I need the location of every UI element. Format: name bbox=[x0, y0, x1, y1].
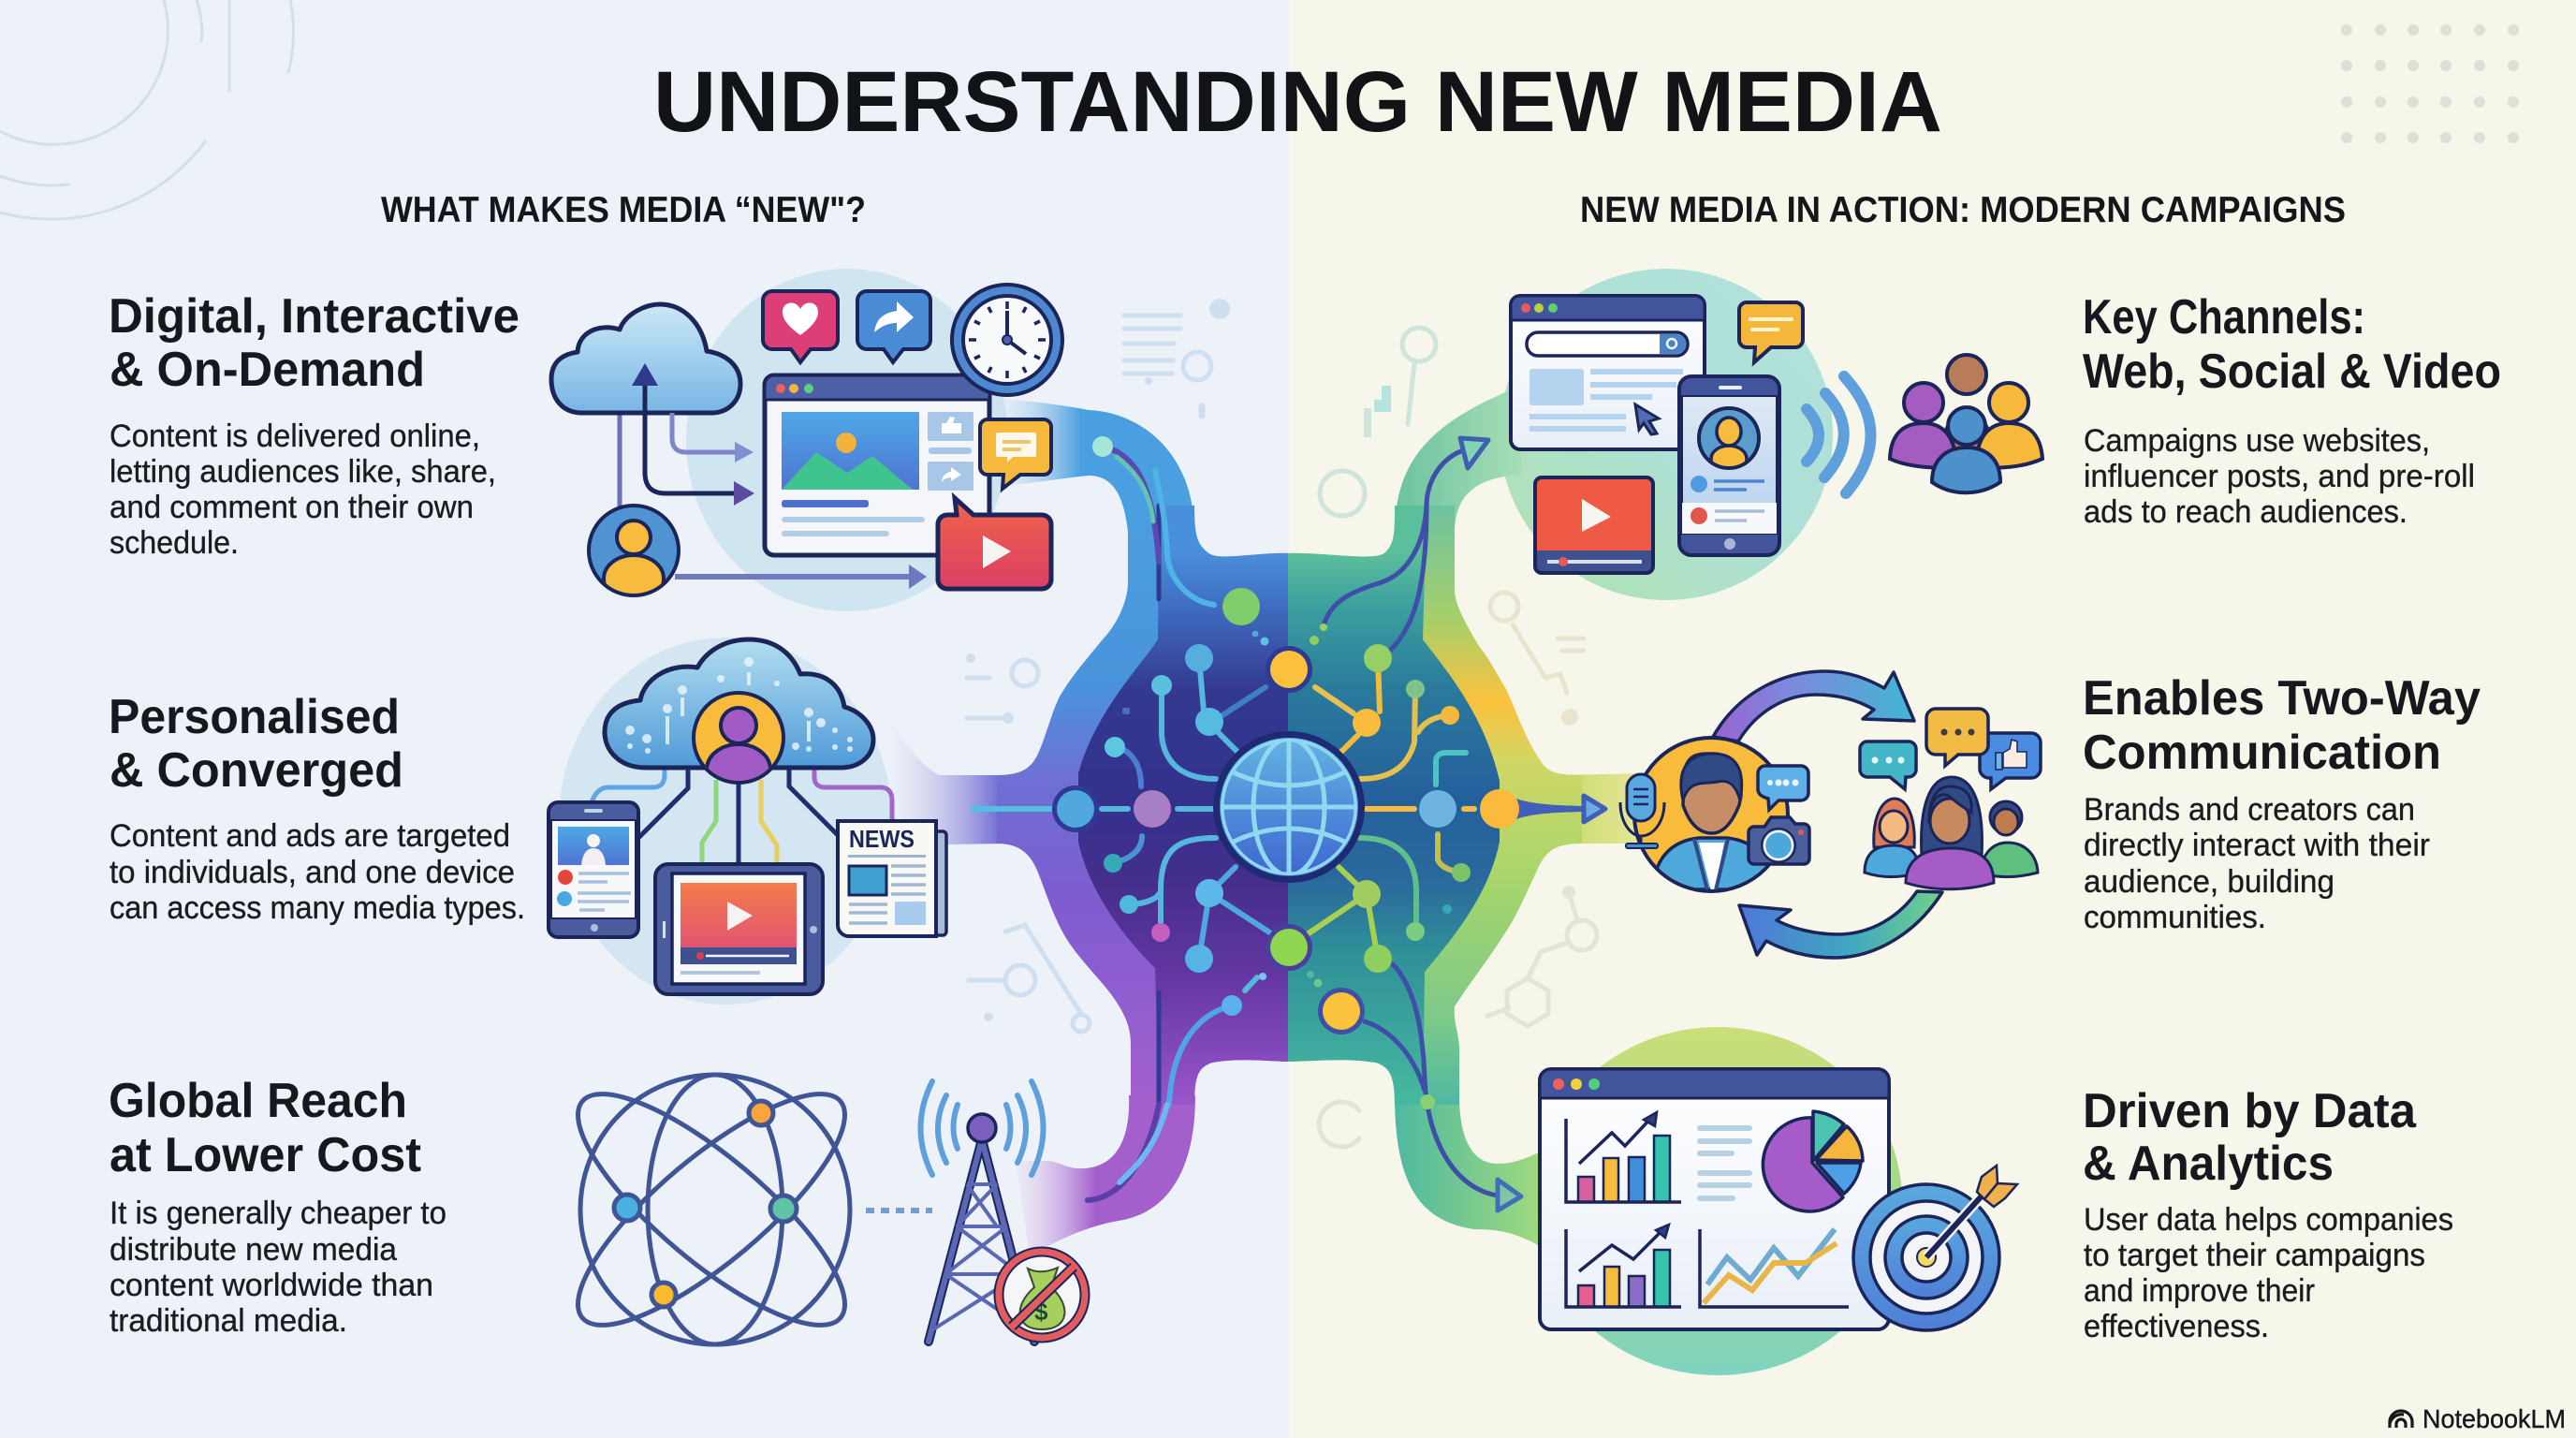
left section heading: WHAT MAKES MEDIA “NEW"? bbox=[381, 190, 866, 230]
dotted link bbox=[866, 1208, 932, 1213]
arm: bottom-right bbox=[1395, 1095, 1549, 1251]
connector lines bbox=[592, 768, 892, 864]
line chart bbox=[1700, 1229, 1849, 1307]
bubble: digital bbox=[686, 269, 1008, 611]
arrow: cloud sync dark bbox=[632, 363, 754, 506]
node: bottom right junction bbox=[1420, 1094, 1435, 1109]
title: UNDERSTANDING NEW MEDIA bbox=[653, 54, 1942, 150]
icon: video player bbox=[938, 498, 1051, 589]
icon: yellow message bubble bbox=[1739, 302, 1803, 362]
text block: global reach: content worldwide than bbox=[110, 1268, 433, 1303]
icon: heart speech bubble bbox=[763, 291, 838, 362]
arrow: user to video bbox=[675, 565, 927, 589]
icon: microphone bbox=[1620, 774, 1664, 848]
decoration: faint circuit marks bbox=[966, 299, 1597, 1147]
text block: two-way communication bbox=[2083, 671, 2481, 935]
text block: key channels: Web, Social & Video bbox=[2083, 345, 2501, 399]
arrow: outgoing loop bbox=[1713, 671, 1914, 741]
icon group: global network and tower bbox=[549, 1061, 1086, 1358]
text block: global reach: at Lower Cost bbox=[110, 1128, 421, 1182]
footer: NotebookLM badge: NotebookLM bbox=[2422, 1404, 2566, 1433]
arm: top-right bbox=[1395, 386, 1521, 534]
icon: share speech bubble bbox=[857, 291, 930, 362]
arrow: return loop bbox=[1739, 891, 1942, 958]
bar chart: bottom bbox=[1566, 1225, 1681, 1307]
text block: personalised: & Converged bbox=[110, 743, 403, 798]
bubble: channels bbox=[1500, 269, 1833, 600]
icon: clock bbox=[952, 285, 1062, 395]
icon: browser window bbox=[765, 375, 989, 555]
text block: data and analytics: effectiveness. bbox=[2084, 1309, 2269, 1344]
text block: digital, interactive: & On-Demand bbox=[110, 343, 425, 397]
text block: two-way communication: Communication bbox=[2083, 726, 2441, 780]
text block: global reach: distribute new media bbox=[110, 1232, 397, 1268]
right section heading: NEW MEDIA IN ACTION: MODERN CAMPAIGNS bbox=[1580, 190, 2346, 230]
text block: global reach bbox=[109, 1074, 446, 1339]
icon group: cloud, browser and video bbox=[551, 285, 1062, 602]
bubble: data bbox=[1533, 1027, 1902, 1375]
bubble: yellow bbox=[1926, 709, 1988, 766]
text block: global reach: traditional media. bbox=[110, 1303, 347, 1339]
text block: digital, interactive: Digital, Interactive bbox=[109, 289, 520, 344]
icon: radio tower bbox=[921, 1081, 1043, 1342]
text block: data and analytics: User data helps companies bbox=[2084, 1202, 2453, 1238]
connector: user to cloud bbox=[618, 413, 622, 510]
text block: personalised: can access many media types. bbox=[110, 890, 525, 926]
text block: global reach: Global Reach bbox=[109, 1074, 407, 1128]
bubble: personalised bbox=[559, 638, 892, 1005]
tapered connector to the host bbox=[1509, 796, 1584, 822]
icon: newspaper bbox=[838, 821, 946, 936]
arm: bottom-left bbox=[1016, 1095, 1195, 1256]
text block: personalised: to individuals, and one device bbox=[110, 855, 515, 890]
background: left panel bbox=[0, 0, 1289, 1438]
node: mint endpoint bbox=[1092, 436, 1113, 457]
text block: personalised: Content and ads are targeted bbox=[110, 818, 510, 854]
text block: two-way communication: Enables Two-Way bbox=[2083, 671, 2481, 726]
text placeholder lines bbox=[1700, 1128, 1749, 1198]
icon: cloud bbox=[551, 304, 740, 413]
decoration: top-right dot grid bbox=[2341, 24, 2519, 143]
text block: digital, interactive bbox=[109, 289, 520, 561]
text block: two-way communication: audience, building bbox=[2084, 864, 2334, 900]
icon group: cloud delivering to devices bbox=[549, 639, 946, 994]
icon: data cloud bbox=[605, 639, 873, 768]
icon: video player bbox=[1535, 477, 1653, 573]
text block: data and analytics bbox=[2083, 1084, 2453, 1344]
arm: middle-left bbox=[889, 719, 1006, 845]
pie chart bbox=[1763, 1111, 1863, 1211]
text block: digital, interactive: schedule. bbox=[110, 525, 239, 561]
bar chart: top bbox=[1566, 1112, 1681, 1202]
arm: top-left bbox=[992, 398, 1194, 571]
text block: data and analytics: and improve their bbox=[2084, 1273, 2315, 1309]
icon group: web, social and video channels bbox=[1511, 296, 2042, 573]
icon: creator portrait bbox=[1634, 738, 1788, 899]
text block: global reach: It is generally cheaper to bbox=[110, 1196, 446, 1231]
icon: blue chat bubble bbox=[1758, 766, 1808, 810]
icon: NotebookLM logo bbox=[2390, 1411, 2412, 1428]
icon: tablet with video bbox=[655, 864, 823, 994]
text block: key channels: ads to reach audiences. bbox=[2084, 494, 2408, 530]
hub: left outer band bbox=[997, 506, 1289, 1105]
text block: two-way communication: communities. bbox=[2084, 900, 2266, 935]
text block: key channels: Campaigns use websites, bbox=[2084, 423, 2430, 459]
arrowhead: bottom right bbox=[1498, 1180, 1521, 1211]
person: centre woman bbox=[1906, 777, 1994, 889]
icon: central globe bbox=[1213, 731, 1365, 883]
background: right panel bbox=[1289, 0, 2576, 1438]
icon: network globe bbox=[549, 1061, 874, 1358]
icon: user avatar on cloud bbox=[694, 693, 783, 795]
icon: user avatar bbox=[589, 506, 679, 602]
hub: right outer band bbox=[1288, 506, 1582, 1105]
arrow: cloud to browser light bbox=[672, 413, 754, 462]
person: right man bbox=[1980, 801, 2038, 877]
nodes bbox=[1052, 588, 1519, 1034]
text block: key channels: influencer posts, and pre-roll bbox=[2084, 459, 2475, 494]
text block: two-way communication: Brands and creators can bbox=[2084, 792, 2415, 828]
icon group: two-way communication bbox=[1620, 671, 2041, 958]
text block: data and analytics: Driven by Data bbox=[2083, 1084, 2417, 1138]
text block: digital, interactive: Content is delivered online, bbox=[110, 418, 480, 454]
icon: audience with reactions bbox=[1860, 709, 2041, 889]
text block: digital, interactive: letting audiences like, share, bbox=[110, 454, 496, 490]
arrowhead: middle right bbox=[1584, 796, 1605, 822]
person: left woman bbox=[1865, 799, 1919, 876]
icon: smartphone profile bbox=[1679, 376, 1779, 555]
text block: key channels: Key Channels: bbox=[2083, 290, 2365, 345]
icon: no-money sign bbox=[998, 1251, 1086, 1339]
icon: audience group bbox=[1890, 355, 2042, 492]
icon: broadcast waves bbox=[1807, 376, 1871, 493]
icon: phone bbox=[549, 802, 638, 937]
text block: digital, interactive: and comment on their own bbox=[110, 490, 474, 525]
central hub network bbox=[889, 386, 1657, 1256]
text block: data and analytics: & Analytics bbox=[2083, 1137, 2334, 1191]
decoration: top-left arcs bbox=[0, 0, 294, 219]
hub: left inner body bbox=[1078, 506, 1289, 1105]
bubble: teal bbox=[1860, 741, 1916, 789]
bubble: blue thumbs up bbox=[1980, 733, 2041, 789]
text block: two-way communication: directly interact with their bbox=[2084, 828, 2430, 863]
text block: personalised bbox=[109, 690, 525, 926]
arm: middle-right bbox=[1554, 773, 1657, 844]
text block: key channels bbox=[2083, 290, 2501, 530]
text block: personalised: Personalised bbox=[109, 690, 400, 744]
arm arrows bbox=[1088, 448, 1498, 1200]
dashboard window bbox=[1540, 1069, 1889, 1329]
icon: yellow chat bubble bbox=[980, 419, 1051, 489]
hub: right inner body bbox=[1288, 506, 1500, 1105]
icon: newspaper: NEWS bbox=[849, 825, 915, 853]
text block: data and analytics: to target their campaigns bbox=[2084, 1238, 2425, 1273]
icon: target with arrow bbox=[1853, 1166, 2017, 1330]
circuit lines bbox=[973, 658, 1474, 990]
arrowhead: top right bbox=[1460, 438, 1488, 468]
icon: no-money sign: $ bbox=[1034, 1298, 1048, 1326]
icon: browser with search bbox=[1511, 296, 1705, 449]
icon: camera bbox=[1749, 817, 1809, 864]
icon group: analytics dashboard bbox=[1540, 1069, 2017, 1330]
